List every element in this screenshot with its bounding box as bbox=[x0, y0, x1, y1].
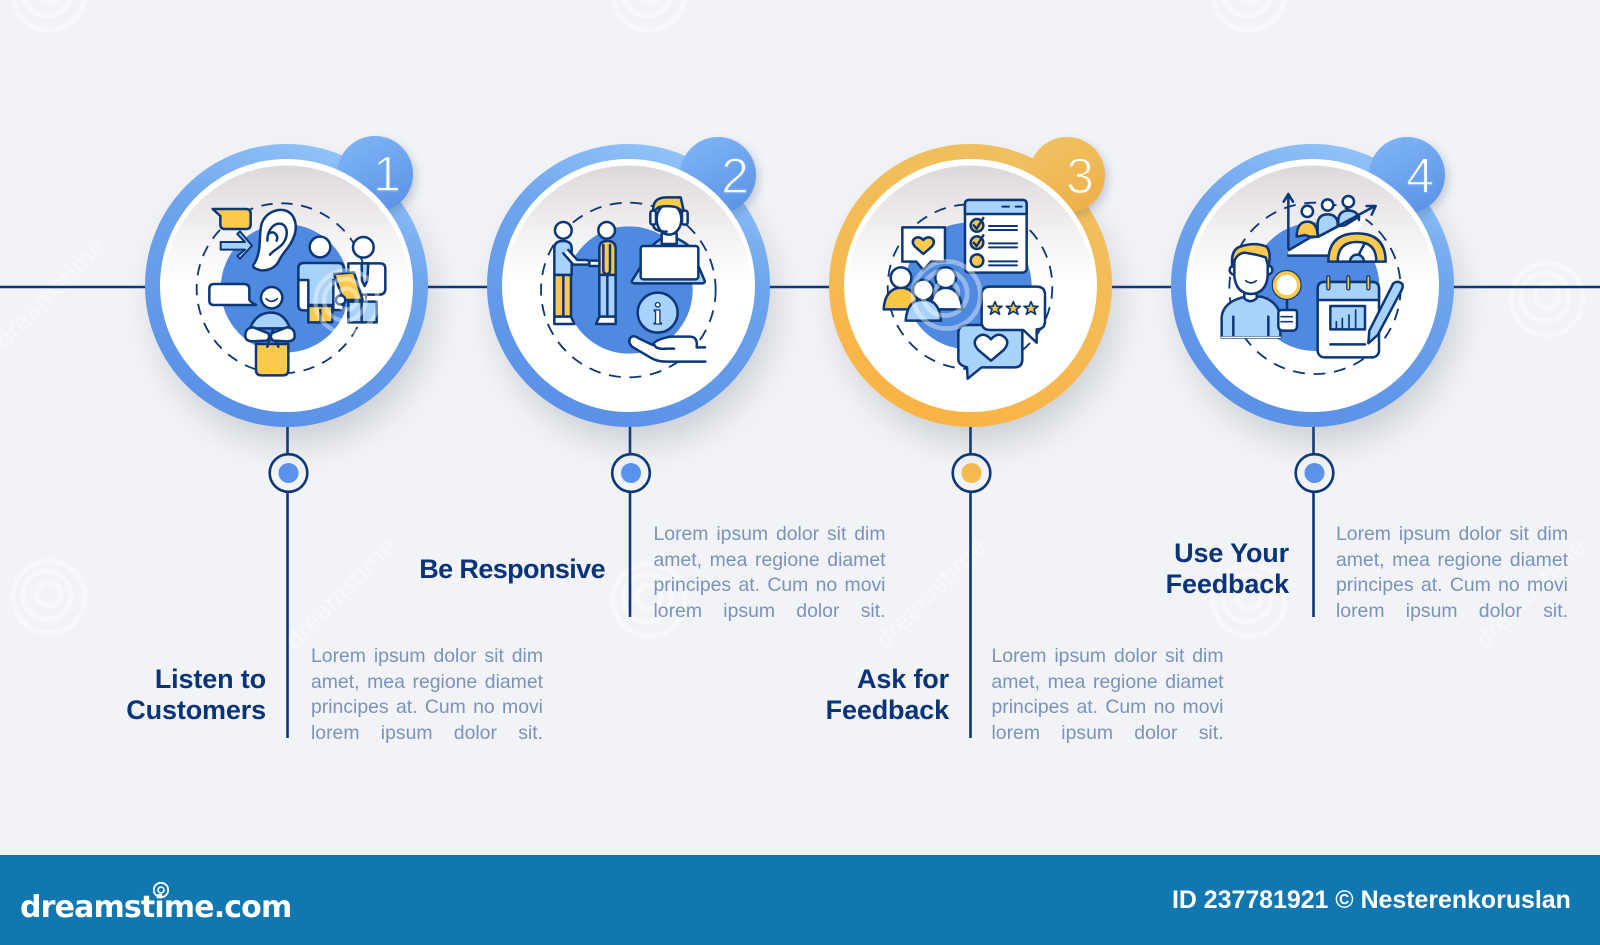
number badge 2: 2 bbox=[721, 148, 749, 204]
text block: step 1 description: amet, mea regione diamet bbox=[311, 671, 543, 693]
text block: step 3 description: Lorem ipsum dolor sit dim bbox=[992, 645, 1224, 667]
step 2 connector and node bbox=[612, 420, 650, 617]
text block: step 4 description: lorem ipsum dolor sit. bbox=[1336, 600, 1568, 622]
heading: Use Your Feedback: Use Your bbox=[1174, 538, 1289, 568]
image ID and credit: ID 237781921 © Nesterenkoruslan bbox=[1172, 886, 1571, 914]
heading: Use Your Feedback: Feedback bbox=[1166, 569, 1289, 599]
footer logo text: dreamstime.com bbox=[20, 890, 291, 925]
number badge 1: 1 bbox=[373, 146, 401, 202]
step 4 connector and node bbox=[1296, 420, 1333, 617]
icon: listening to customers bbox=[197, 203, 385, 375]
number badge 2 bbox=[680, 137, 756, 213]
text block: step 1 description: Lorem ipsum dolor sit dim bbox=[311, 645, 543, 667]
text block: step 2 description: Lorem ipsum dolor sit dim bbox=[654, 523, 886, 545]
text block: step 2 description bbox=[654, 523, 886, 622]
infographic artwork: timeline and step circles: dreamstime bbox=[869, 533, 991, 654]
icon: using feedback data bbox=[1222, 194, 1403, 374]
step 1 connector and node bbox=[270, 420, 307, 738]
text block: step 3 description: amet, mea regione diamet bbox=[992, 671, 1224, 693]
step 3 circle bbox=[829, 137, 1116, 443]
text block: step 4 description: Lorem ipsum dolor sit dim bbox=[1336, 523, 1568, 545]
number badge 1 bbox=[337, 136, 413, 212]
number badge 3: 3 bbox=[1066, 148, 1094, 204]
text block: step 1 description: principes at. Cum no movi bbox=[311, 696, 543, 718]
text block: step 4 description bbox=[1336, 523, 1568, 622]
icon: responsive support bbox=[541, 197, 716, 377]
step 2 circle bbox=[487, 137, 774, 443]
text block: step 1 description bbox=[311, 645, 543, 744]
infographic artwork: timeline and step circles: dreamstime bbox=[1469, 533, 1591, 654]
heading: Ask for Feedback: Ask for bbox=[857, 664, 949, 694]
text block: step 1 description: lorem ipsum dolor sit. bbox=[311, 722, 543, 744]
footer bar bbox=[0, 855, 1600, 945]
heading: Ask for Feedback bbox=[826, 664, 950, 725]
text block: step 2 description: lorem ipsum dolor sit. bbox=[654, 600, 886, 622]
heading: Listen to Customers bbox=[126, 664, 266, 725]
text block: step 2 description: amet, mea regione diamet bbox=[654, 549, 886, 571]
infographic artwork: timeline and step circles: dreamstime bbox=[279, 533, 401, 654]
number badge 4 bbox=[1369, 137, 1445, 213]
number badge 4: 4 bbox=[1406, 148, 1434, 204]
icon: responsive support: i bbox=[653, 297, 662, 331]
text block: step 4 description: principes at. Cum no movi bbox=[1336, 574, 1568, 596]
text block: step 3 description: principes at. Cum no movi bbox=[992, 696, 1224, 718]
step 3 connector and node bbox=[953, 420, 990, 738]
horizontal timeline bbox=[0, 286, 1600, 288]
heading: Ask for Feedback: Feedback bbox=[826, 695, 949, 725]
step 1 circle bbox=[145, 136, 432, 443]
step 4 circle bbox=[1171, 137, 1458, 443]
icon: logo spiral bbox=[152, 882, 170, 898]
icon: asking for feedback bbox=[884, 200, 1052, 379]
number badge 3 bbox=[1029, 137, 1105, 213]
heading: Use Your Feedback bbox=[1166, 538, 1290, 599]
heading: Be Responsive: Be Responsive bbox=[419, 554, 605, 584]
text block: step 3 description bbox=[992, 645, 1224, 744]
heading: Listen to Customers: Listen to bbox=[155, 664, 266, 694]
heading: Listen to Customers: Customers bbox=[126, 695, 266, 725]
text block: step 3 description: lorem ipsum dolor sit. bbox=[992, 722, 1224, 744]
text block: step 4 description: amet, mea regione diamet bbox=[1336, 549, 1568, 571]
text block: step 2 description: principes at. Cum no movi bbox=[654, 574, 886, 596]
